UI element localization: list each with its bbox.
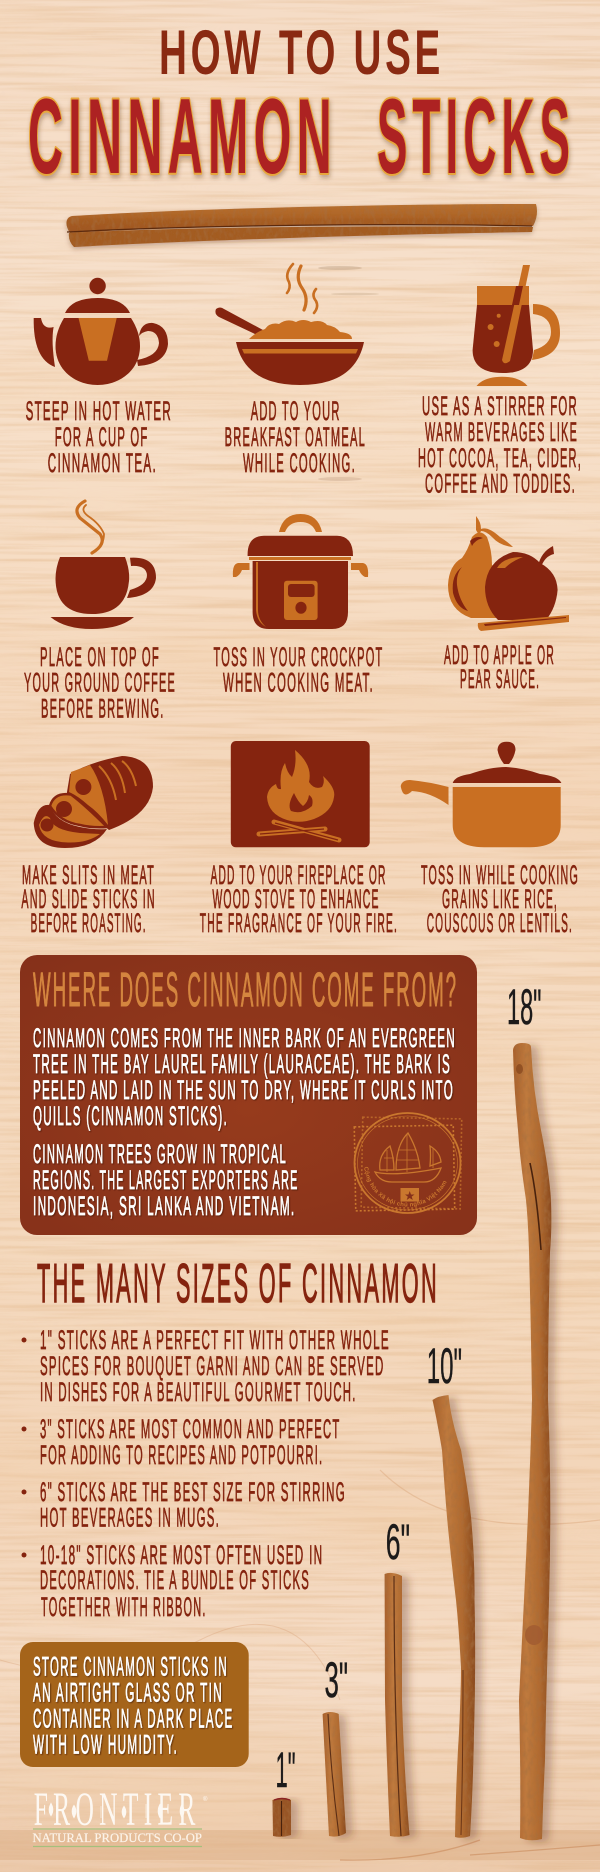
infographic canvas: PLACE ON TOP OF (40, 642, 160, 672)
stick: 6 inch (385, 1573, 410, 1837)
size labels: 6" (386, 1514, 410, 1570)
panel text (33, 1023, 456, 1221)
icon: coffee cup and saucer (50, 501, 156, 629)
infographic canvas: BEFORE BREWING. (41, 694, 165, 724)
stick: 1 inch (272, 1798, 291, 1837)
icon: saucepan (401, 742, 561, 847)
icon: teapot (34, 278, 168, 385)
caption: fruit sauce (444, 640, 555, 694)
stick: 3 inch (323, 1712, 346, 1837)
infographic canvas: WHILE COOKING. (243, 448, 356, 478)
bullet 3: HOT BEVERAGES IN MUGS. (40, 1503, 220, 1533)
tip: oatmeal (215, 264, 366, 478)
icon: campfire tile (231, 741, 370, 847)
infographic canvas: STORE CINNAMON STICKS IN (33, 1652, 228, 1682)
caption: tea: FOR A CUP OF (55, 422, 149, 452)
infographic canvas: STEEP IN HOT WATER (26, 396, 172, 426)
bullet 4: TOGETHER WITH RIBBON. (41, 1592, 207, 1622)
caption: grains (421, 860, 579, 938)
stick: 10 inch (432, 1395, 475, 1838)
logo: frontier natural products co-op: ® (203, 1796, 208, 1803)
bullet 4 (22, 1540, 323, 1622)
tip: roast (21, 756, 156, 938)
icon: mug with cinnamon stirrer (473, 265, 560, 386)
size labels (276, 979, 542, 1798)
tip: coffee (24, 501, 176, 724)
icon: vietnam stamp with junk ship (354, 1112, 462, 1214)
infographic canvas: WHEN COOKING MEAT. (223, 668, 374, 698)
tip: fireplace (200, 741, 398, 938)
infographic canvas: CONTAINER IN A DARK PLACE (33, 1704, 234, 1734)
icon: sliced roast (34, 756, 153, 848)
caption: tea (26, 396, 172, 478)
caption: roast (21, 860, 156, 938)
infographic canvas: CINNAMON TEA. (48, 448, 157, 478)
panel: where does cinnamon come from (20, 955, 477, 1235)
panel text: QUILLS (CINNAMON STICKS). (33, 1101, 228, 1131)
caption: fireplace (200, 860, 398, 938)
logo: frontier natural products co-op: NATURAL PRODUCTS CO-OP (32, 1830, 202, 1845)
caption: crockpot (214, 642, 384, 698)
icon: steaming oatmeal bowl (215, 264, 364, 385)
size labels: 3" (324, 1652, 348, 1708)
infographic canvas: AND SLIDE STICKS IN (21, 884, 156, 914)
size labels: 1" (276, 1742, 296, 1798)
size labels: 10" (427, 1338, 462, 1394)
bullet 2 (22, 1414, 341, 1470)
logo: frontier natural products co-op (32, 1783, 208, 1846)
tip: tea (26, 278, 172, 478)
logo: frontier natural products co-op: FRONTIER (34, 1783, 201, 1836)
tip: grains (401, 742, 579, 938)
title (28, 18, 575, 196)
tip: fruit sauce (444, 516, 569, 694)
caption: coffee (24, 642, 176, 724)
infographic canvas: 18" (507, 979, 542, 1035)
size list (22, 1325, 390, 1622)
panel: storage tip (20, 1642, 249, 1767)
icon: crockpot (233, 514, 368, 629)
caption: stirrer (418, 391, 582, 499)
stick: 18 inch (513, 1043, 551, 1840)
icon: pear, apple and stick (448, 516, 569, 631)
caption: oatmeal: ADD TO YOUR (251, 396, 341, 426)
bullet 3 (22, 1477, 346, 1533)
infographic canvas: YOUR GROUND COFFEE (24, 668, 176, 698)
storage text (33, 1652, 234, 1760)
infographic canvas: BREAKFAST OATMEAL (225, 422, 366, 452)
caption: oatmeal (225, 396, 366, 478)
infographic canvas: BEFORE ROASTING. (31, 908, 147, 938)
hero cinnamon stick (66, 204, 537, 247)
tip: crockpot (214, 514, 384, 698)
infographic canvas: MAKE SLITS IN MEAT (22, 860, 155, 890)
cinnamon sticks by size (272, 1043, 551, 1840)
storage text: WITH LOW HUMIDITY. (33, 1730, 178, 1760)
bullet 1 (22, 1325, 390, 1407)
icon: vietnam stamp with junk ship: Cộng hòa Xã hội chủ nghĩa Việt Nam (364, 1166, 446, 1208)
tip: stirrer (418, 265, 582, 499)
infographic canvas: AN AIRTIGHT GLASS OR TIN (33, 1678, 223, 1708)
